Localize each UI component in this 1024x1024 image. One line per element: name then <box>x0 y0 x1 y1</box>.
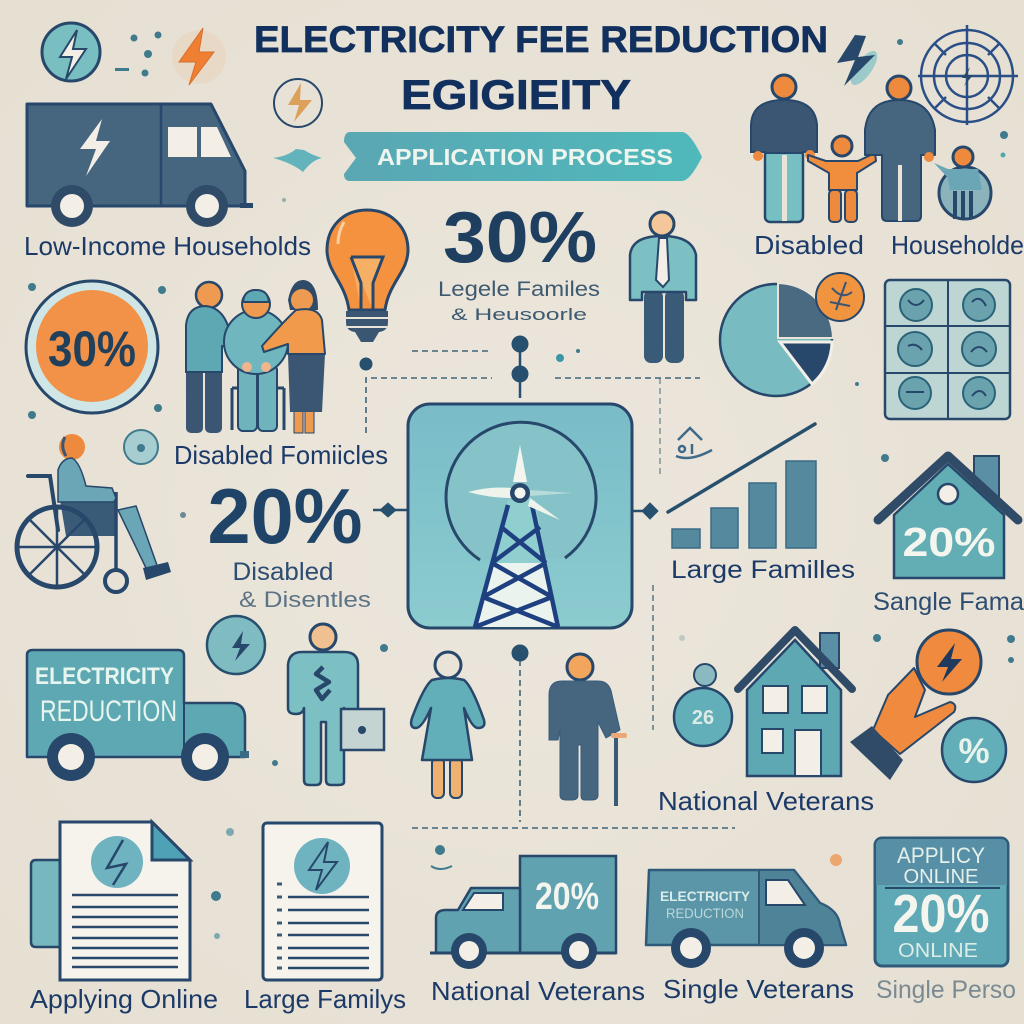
icon: people supporting <box>186 280 325 433</box>
label: low-income households: Low-Income Households <box>24 231 311 261</box>
icon: medal badge: 26 <box>692 707 714 729</box>
stat: 20% disabled: & Disentles <box>239 587 371 612</box>
icon: electricity truck: ELECTRICITY <box>660 888 751 904</box>
icon: 30% circle badge: 30% <box>48 321 136 377</box>
title: EGIGIEITY <box>401 71 631 118</box>
label: large families bottom: Large Familys <box>244 984 406 1014</box>
connector lines <box>366 351 735 828</box>
stat: 20% disabled <box>208 472 371 612</box>
icon: truck 20% <box>430 856 616 969</box>
icon: orange percent badge <box>816 273 864 321</box>
label: single veterans: Single Veterans <box>663 974 854 1004</box>
title <box>254 19 828 118</box>
icon: electricity truck: REDUCTION <box>666 905 744 921</box>
label: national veterans: National Veterans <box>658 786 874 816</box>
icon: delivery truck low-income <box>27 104 253 227</box>
icon: electricity reduction truck <box>27 650 249 781</box>
figure: seated person <box>224 290 288 431</box>
icon: percent coin: % <box>958 732 990 771</box>
icon: top orange bolt badge <box>172 28 226 85</box>
stat: 20% disabled: Disabled <box>232 558 334 586</box>
figure: child <box>808 136 876 222</box>
icon: medal badge <box>674 664 732 746</box>
figure: helper man <box>186 282 240 433</box>
icon: woman figure <box>411 652 484 798</box>
icon: radial grid target <box>918 25 1018 125</box>
icon: document applying online <box>31 822 190 980</box>
label: disabled families: Disabled Fomiicles <box>174 440 388 470</box>
icon: small bolt circle <box>274 79 322 127</box>
connector nodes <box>360 336 658 661</box>
icon: small plug sketch <box>676 428 712 458</box>
figure: helper woman <box>262 280 325 433</box>
icon: pie chart <box>720 283 833 396</box>
stat: 30% legele families <box>438 198 600 324</box>
icon: truck 20%: 20% <box>535 876 599 918</box>
banner: application process: APPLICATION PROCESS <box>377 144 673 170</box>
stat: 30% legele families: Legele Familes <box>438 278 600 301</box>
icon: hand holding bolt coin <box>850 630 981 780</box>
icon: electricity reduction truck: REDUCTION <box>40 695 177 728</box>
label: disabled households: Disabled <box>754 230 864 260</box>
icon: wheelchair user <box>17 434 171 592</box>
label: disabled households <box>754 230 1024 260</box>
title: ELECTRICITY FEE REDUCTION <box>254 19 828 60</box>
figure: man right <box>865 76 935 221</box>
icon: man with tie <box>630 212 696 363</box>
icon: house <box>738 630 852 776</box>
icon: family group <box>751 75 991 222</box>
icon: light bulb <box>327 210 408 342</box>
icon: drop circle <box>124 430 158 464</box>
icon: person with briefcase <box>288 624 384 785</box>
icon: house 20%: 20% <box>902 519 996 565</box>
panel: apply online 20% <box>875 838 1008 966</box>
stat: 20% disabled: 20% <box>208 472 362 560</box>
panel: apply online 20%: ONLINE <box>898 940 978 962</box>
icon: grid of tiles <box>885 280 1010 419</box>
label: large families: Large Familles <box>671 556 855 584</box>
icon: house 20% <box>878 456 1018 578</box>
banner: application process <box>344 132 702 181</box>
label: applying online: Applying Online <box>30 984 218 1014</box>
icon: dark bolt <box>837 35 882 89</box>
panel: apply online 20%: 20% <box>892 884 990 944</box>
icon: elderly man with cane <box>549 654 627 806</box>
icon: 30% circle badge <box>26 281 158 413</box>
panel: center tower <box>408 404 632 628</box>
icon: bolt circle <box>207 616 265 674</box>
label: national veterans bottom: National Veterans <box>431 976 645 1006</box>
icon: top left bolt badge <box>42 23 100 81</box>
stat: 30% legele families: & Heusoorle <box>451 305 587 324</box>
label: single person: Single Perso <box>876 976 1016 1004</box>
panel: apply online 20%: ONLINE <box>904 866 978 888</box>
panel: apply online 20%: APPLICY <box>897 843 985 868</box>
icon: document large families <box>263 823 382 980</box>
figure: wheelchair child <box>934 147 991 220</box>
figure: man left <box>751 75 817 222</box>
label: single family: Sangle Fama <box>873 588 1024 616</box>
icon: electricity reduction truck: ELECTRICITY <box>35 663 174 690</box>
stat: 30% legele families: 30% <box>443 198 597 278</box>
arrow: to application banner <box>273 149 322 172</box>
icon: percent coin <box>942 718 1006 782</box>
icon: electricity truck <box>646 870 846 968</box>
bar chart with trend line <box>668 424 816 548</box>
